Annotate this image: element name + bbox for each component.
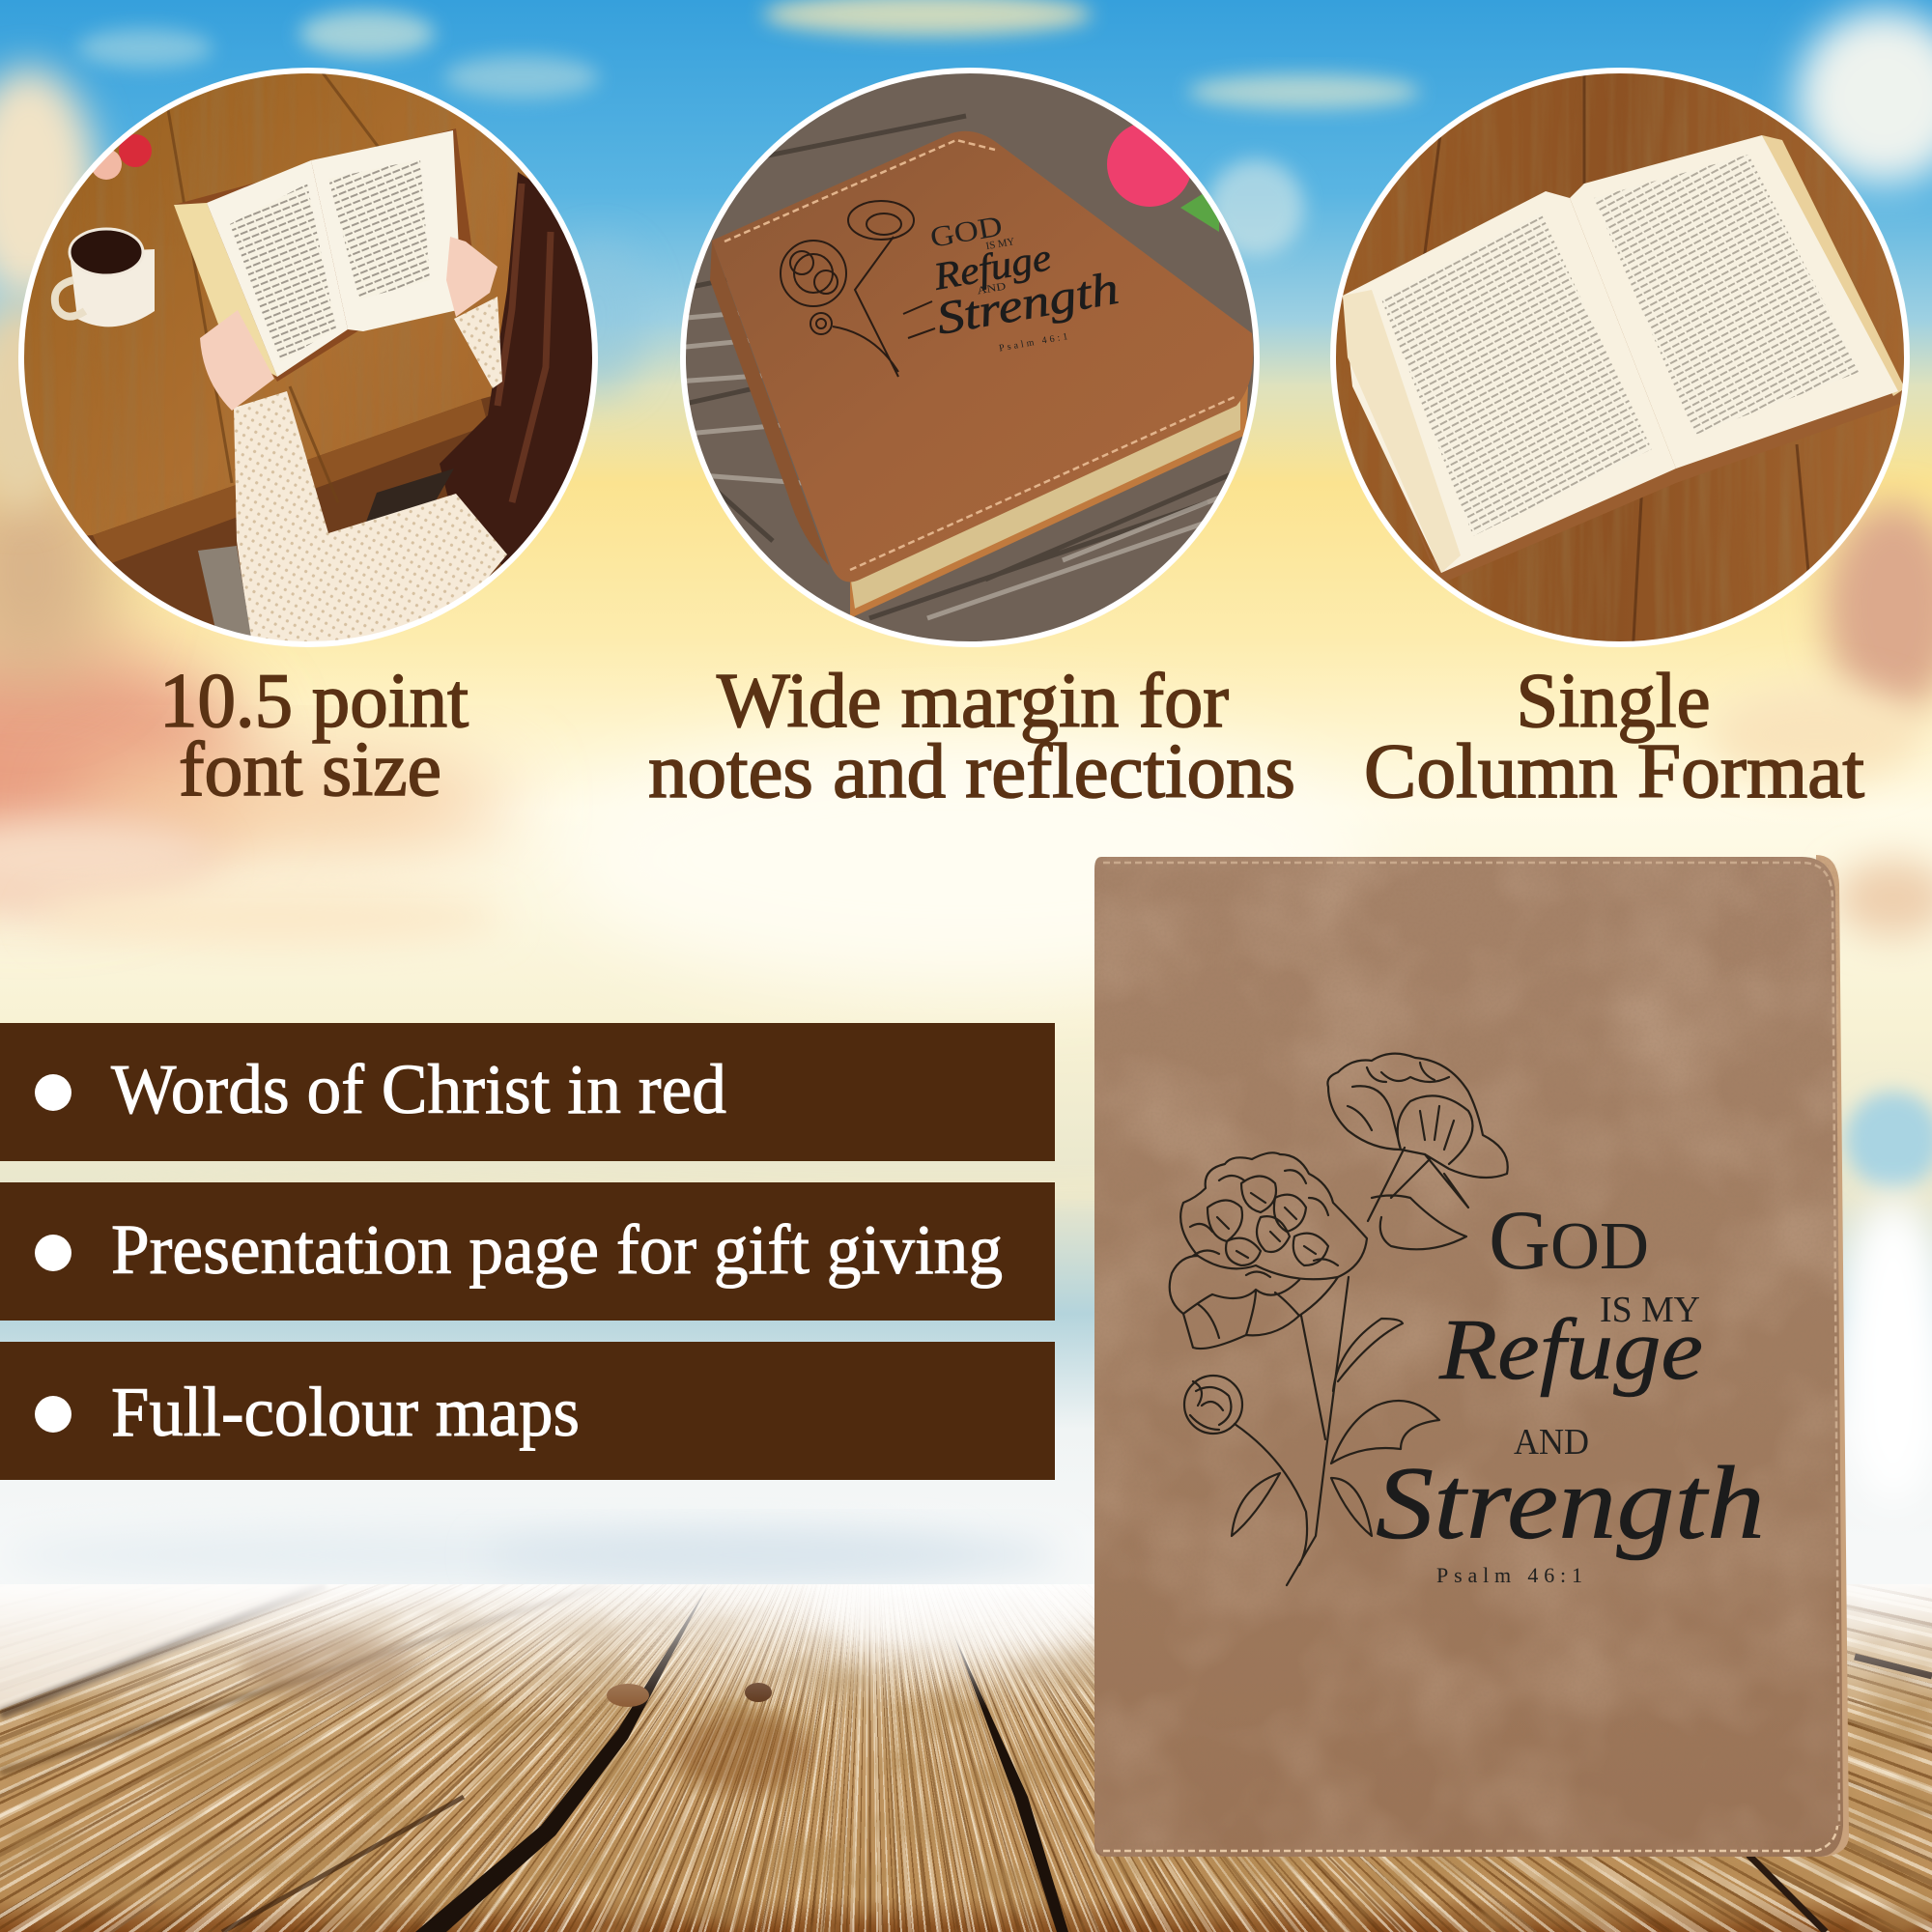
bud [1184,1376,1242,1434]
engraved verse [1376,1194,1765,1587]
engraved cover text: AND [977,280,1007,298]
engraved cover text: Psalm 46:1 [998,331,1068,354]
page block edge [1101,855,1849,1857]
upper peony [1327,1054,1508,1208]
engraved verse: Refuge [1438,1302,1703,1398]
feature bar: maps [0,1342,1055,1480]
book [1337,332,1908,583]
caption: wide margin: Wide margin for [717,659,1229,744]
feature bar: words of Christ: Words of Christ in red [111,1050,726,1128]
engraved cover text: IS MY [985,236,1015,252]
caption: font size [159,659,469,812]
Bible cover product shot [1094,855,1849,1857]
engraved cover text: Strength [932,263,1122,345]
engraved verse: IS MY [1600,1290,1700,1330]
caption: font size: font size [179,727,441,812]
photo circle: open Bible single column [1323,68,1922,657]
sweater [234,391,507,657]
engraved flowers [781,201,935,377]
engraved cover text: GOD [927,210,1005,254]
open book [174,128,473,382]
stems and leaves [1232,1148,1466,1585]
wooden table top [0,1546,1932,1932]
photo circle: leather cover close-up [676,68,1265,657]
caption: wide margin [648,659,1295,814]
table front and floor [87,396,502,626]
feature bar: presentation page: Presentation page for gift giving [111,1210,1003,1289]
caption: single column: Single [1517,659,1710,744]
engraved cover text [931,218,1119,352]
feature bar: maps: Full-colour maps [111,1373,580,1451]
caption: single column: Column Format [1364,729,1864,814]
engraved verse: Psalm 46:1 [1436,1563,1582,1587]
feature bar: words of Christ [0,1023,1055,1161]
caption: single column [1364,659,1864,814]
hair [440,172,604,565]
coffee cup [70,249,155,327]
book pages and cover [850,386,1248,618]
engraved cover text: Refuge [929,235,1054,298]
feature bar: presentation page [0,1182,1055,1321]
engraved peony illustration [1170,1054,1508,1585]
large peony [1170,1152,1367,1349]
leather cover [1094,857,1843,1857]
roses [119,134,152,167]
caption: wide margin: notes and reflections [648,729,1295,814]
caption: font size: 10.5 point [159,659,469,744]
rose [1107,122,1192,207]
photo circle: reading at a table [19,68,604,657]
hands [200,310,274,411]
engraved verse: Strength [1376,1446,1765,1561]
engraved verse: AND [1514,1422,1589,1463]
engraved verse: GOD [1489,1194,1649,1288]
